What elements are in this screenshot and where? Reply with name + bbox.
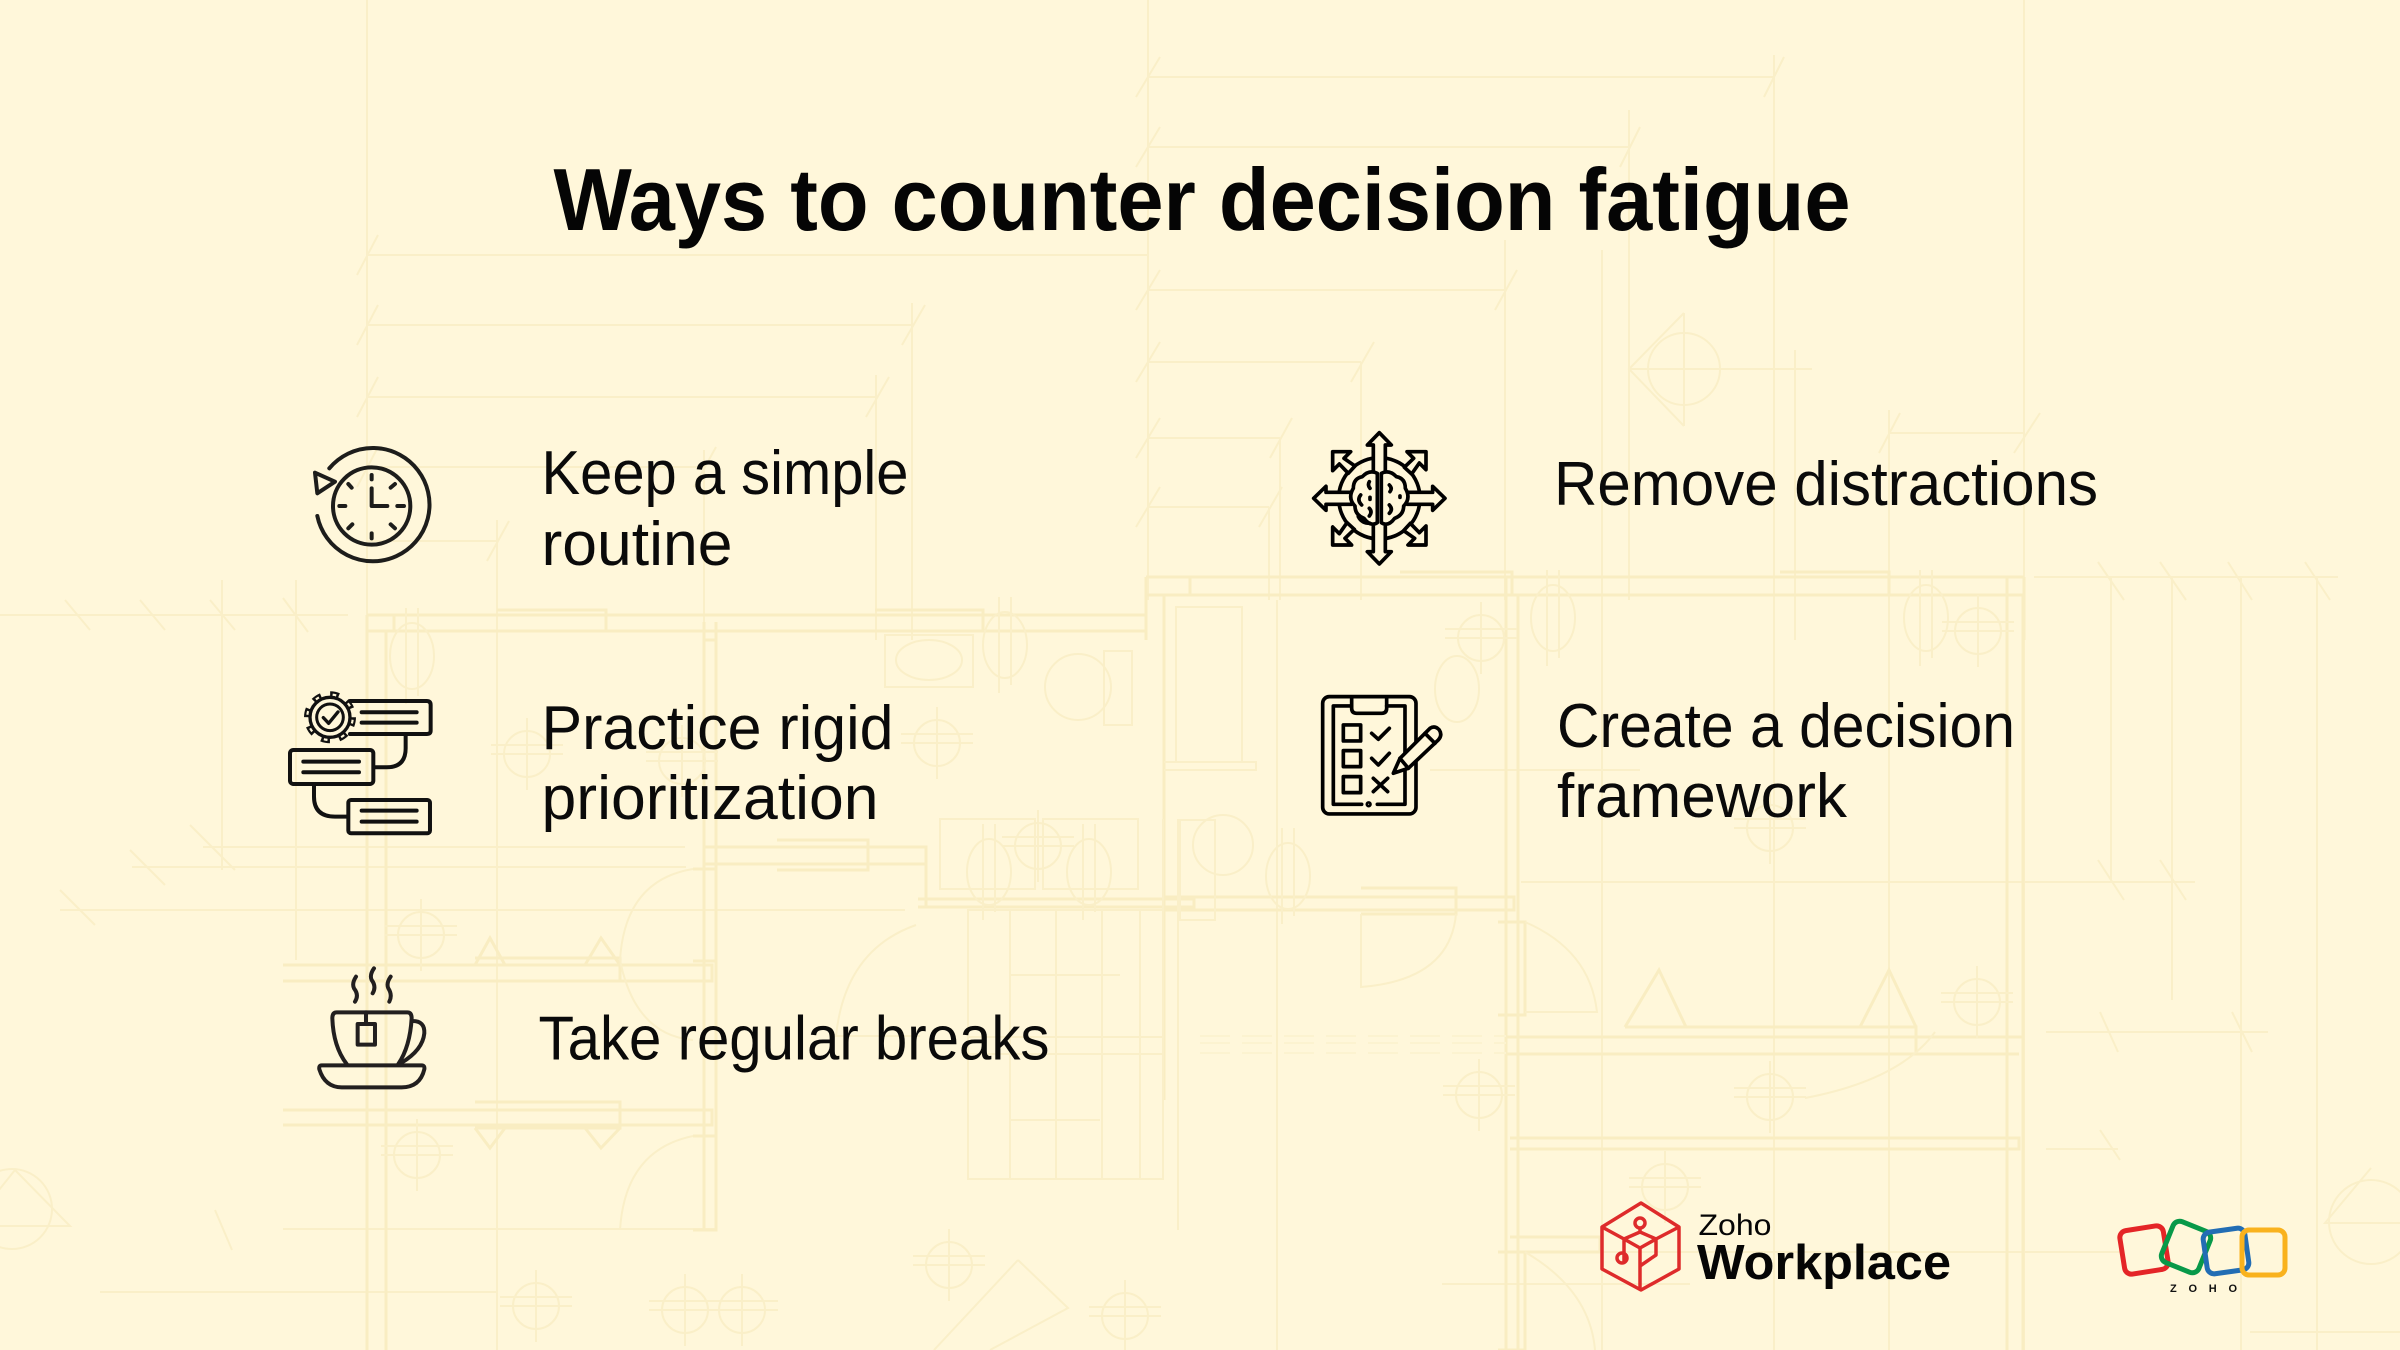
- icon: brain with arrows: [1314, 433, 1445, 564]
- item: take regular breaks: [319, 968, 1050, 1087]
- text: remove distractions: Remove distractions: [1554, 450, 2098, 519]
- text: take regular breaks: Take regular breaks: [538, 1004, 1050, 1074]
- text: ZOHO: ZOHO: [2170, 1283, 2237, 1295]
- text: keep a simple routine: routine: [542, 510, 732, 579]
- text: practice rigid prioritization: prioritization: [542, 764, 878, 833]
- icon: clipboard checklist with pencil: [1323, 697, 1441, 814]
- text: keep a simple routine: Keep a simple: [542, 439, 908, 508]
- text: keep a simple routine: [542, 439, 908, 579]
- text: create a decision framework: [1557, 692, 2015, 831]
- text: create a decision framework: framework: [1557, 762, 1848, 831]
- icon: gear and workflow boxes: [290, 695, 431, 833]
- wordmark: [1697, 1209, 1951, 1290]
- icon: tea cup: [319, 968, 424, 1087]
- text: practice rigid prioritization: Practice rigid: [542, 694, 894, 763]
- wordmark: Workplace: [1697, 1236, 1951, 1290]
- four coloured rings: [2119, 1219, 2285, 1275]
- wordmark: Zoho: [1698, 1209, 1772, 1242]
- item: remove distractions: [1314, 433, 2098, 564]
- icon: red cube: [1602, 1203, 1679, 1290]
- title: Ways to counter decision fatigue: [554, 150, 1850, 249]
- text: practice rigid prioritization: [542, 694, 894, 833]
- item: create a decision framework: [1323, 692, 2015, 831]
- item: keep a simple routine: [315, 439, 908, 579]
- logo: Zoho: [2119, 1219, 2285, 1295]
- text: create a decision framework: Create a decision: [1557, 692, 2015, 761]
- icon: clock with return arrow: [315, 448, 429, 561]
- item: practice rigid prioritization: [290, 694, 894, 833]
- logo: Zoho Workplace: [1602, 1203, 1951, 1290]
